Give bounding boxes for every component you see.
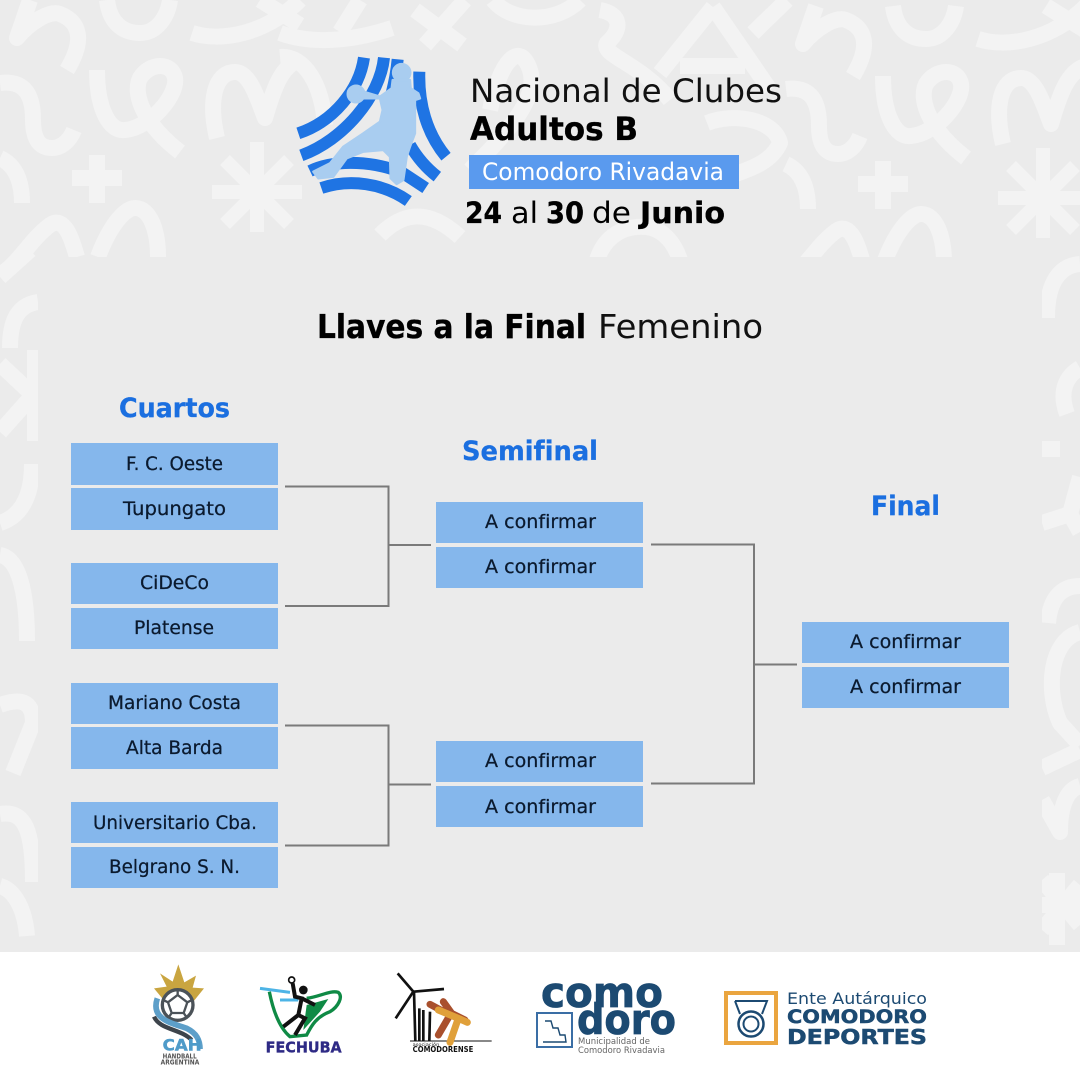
match: CiDeCo vs Platense: Platense bbox=[134, 617, 214, 639]
quarterfinal column bbox=[71, 443, 278, 888]
dates: al bbox=[511, 196, 538, 230]
match: CiDeCo vs Platense bbox=[71, 563, 278, 649]
logo: Asociación Comodorense: COMODORENSE bbox=[413, 1045, 473, 1054]
match: F. C. Oeste vs Tupungato: Tupungato bbox=[122, 498, 226, 520]
logo: Comodoro municipality: Comodoro Rivadavia bbox=[578, 1046, 665, 1056]
match: Mariano Costa vs Alta Barda: Alta Barda bbox=[126, 737, 223, 759]
logo: FECHUBA bbox=[260, 977, 342, 1056]
logo: Asociación Comodorense bbox=[396, 973, 492, 1054]
title: Llaves a la Final bbox=[317, 307, 586, 346]
heading: Cuartos: Cuartos bbox=[119, 393, 230, 424]
match: Universitario Cba. vs Belgrano S. N.: Belgrano S. N. bbox=[109, 856, 240, 878]
logo: Ente Autárquico Comodoro Deportes: Ente Autárquico bbox=[787, 989, 927, 1008]
semifinal match 2: A confirmar bbox=[485, 796, 596, 818]
event header text bbox=[465, 72, 782, 230]
event logo: handball player bbox=[298, 58, 446, 201]
dates: de bbox=[592, 196, 631, 230]
final match: A confirmar bbox=[850, 631, 961, 653]
logo: Ente Autárquico Comodoro Deportes: DEPORTES bbox=[787, 1025, 927, 1049]
event name: Nacional de Clubes bbox=[470, 72, 782, 110]
match: Mariano Costa vs Alta Barda: Mariano Costa bbox=[108, 692, 241, 714]
logo: Ente Autárquico Comodoro Deportes bbox=[726, 989, 927, 1049]
logo: CAH Handball Argentina bbox=[154, 964, 204, 1067]
semifinal match 1 bbox=[436, 502, 643, 588]
category: Adultos B bbox=[470, 110, 638, 148]
semifinal column bbox=[436, 502, 643, 827]
title: Femenino bbox=[598, 307, 763, 346]
logo: Asociación Comodorense: asociación bbox=[413, 1041, 439, 1048]
match: Universitario Cba. vs Belgrano S. N.: Universitario Cba. bbox=[93, 812, 257, 834]
logo: Ente Autárquico Comodoro Deportes: COMODORO bbox=[787, 1006, 927, 1028]
logo: FECHUBA: FECHUBA bbox=[266, 1038, 342, 1056]
heading: Final: Final bbox=[871, 491, 940, 522]
dates bbox=[465, 196, 725, 230]
dates: 24 bbox=[465, 196, 502, 230]
logo: Comodoro municipality: doro bbox=[577, 995, 676, 1044]
logo: Comodoro municipality: como bbox=[541, 968, 663, 1017]
logo: Comodoro municipality: Municipalidad de bbox=[578, 1037, 650, 1047]
title bbox=[317, 307, 763, 346]
logo: CAH Handball Argentina: ARGENTINA bbox=[161, 1059, 200, 1067]
logo: Comodoro municipality bbox=[537, 968, 676, 1056]
semifinal match 2: A confirmar bbox=[485, 750, 596, 772]
logo: CAH Handball Argentina: CAH bbox=[163, 1035, 202, 1054]
match: Universitario Cba. vs Belgrano S. N. bbox=[71, 802, 278, 888]
match: F. C. Oeste vs Tupungato: F. C. Oeste bbox=[126, 453, 223, 475]
match: CiDeCo vs Platense: CiDeCo bbox=[140, 572, 209, 594]
venue badge: Comodoro Rivadavia bbox=[482, 158, 724, 186]
semifinal match 1: A confirmar bbox=[485, 511, 596, 533]
bracket connector lines bbox=[285, 486, 797, 846]
final match bbox=[802, 622, 1009, 708]
heading: Semifinal: Semifinal bbox=[462, 436, 598, 467]
final match: A confirmar bbox=[850, 676, 961, 698]
footer strip bbox=[0, 952, 1080, 1080]
dates: Junio bbox=[638, 196, 725, 230]
semifinal match 2 bbox=[436, 741, 643, 827]
dates: 30 bbox=[546, 196, 584, 230]
match: Mariano Costa vs Alta Barda bbox=[71, 683, 278, 769]
main panel background bbox=[38, 257, 1042, 952]
semifinal match 1: A confirmar bbox=[485, 556, 596, 578]
match: F. C. Oeste vs Tupungato bbox=[71, 443, 278, 530]
logo: CAH Handball Argentina: HANDBALL bbox=[163, 1052, 197, 1060]
